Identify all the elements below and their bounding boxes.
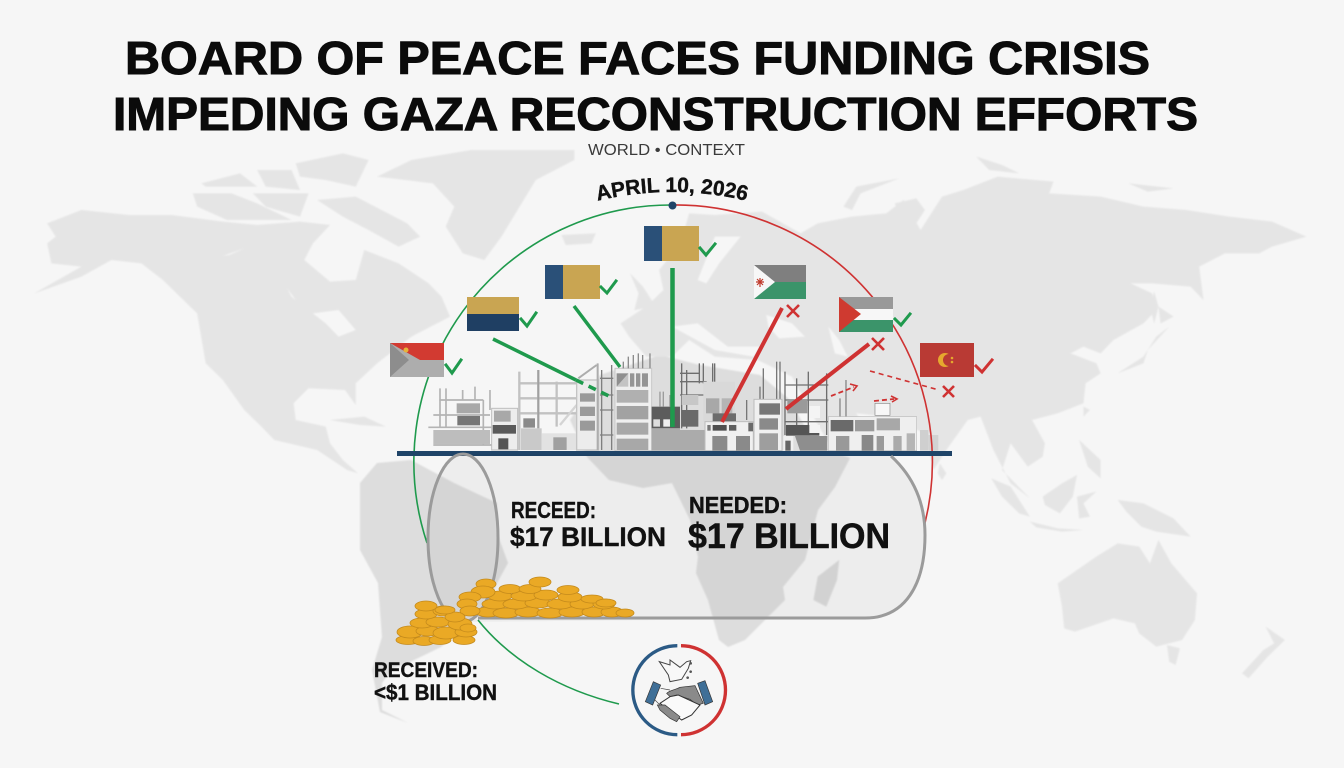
- base bar: [397, 451, 952, 456]
- label: received below pipe: RECEIVED:: [374, 659, 478, 682]
- subtitle: WORLD • CONTEXT: [588, 142, 745, 159]
- date arc label: APRIL 10, 2026: [598, 177, 748, 201]
- red arc: [672, 205, 932, 523]
- flag: Palestine style: [839, 297, 893, 332]
- label: needed: NEEDED:: [689, 492, 787, 518]
- green connector lines: [493, 268, 672, 427]
- construction skyline right: [673, 362, 938, 451]
- label: received inside pipe: [510, 497, 666, 552]
- coin pile spilled: [396, 601, 477, 646]
- construction skyline left: [428, 353, 680, 451]
- flag: grey green white: [754, 265, 806, 299]
- label: received inside pipe: RECEED:: [511, 497, 596, 523]
- funding pipe: [428, 454, 925, 622]
- flag: navy and gold centre: [644, 226, 699, 261]
- world map background: [34, 150, 1306, 723]
- flag: tan over navy: [467, 297, 519, 331]
- green arc: [414, 205, 672, 704]
- flag: red crescent: [920, 343, 974, 377]
- title: BOARD OF PEACE FACES FUNDING CRISIS: [125, 32, 1150, 84]
- title: IMPEDING GAZA RECONSTRUCTION EFFORTS: [113, 88, 1198, 140]
- top dot: [668, 202, 676, 210]
- red connector lines: [722, 308, 939, 422]
- label: received inside pipe: $17 BILLION: [510, 522, 666, 552]
- title: [113, 32, 1198, 140]
- label: received below pipe: <$1 BILLION: [374, 680, 497, 705]
- status check marks: [446, 244, 992, 373]
- label: received below pipe: [374, 659, 497, 705]
- label: needed: [688, 492, 890, 556]
- emblem: dove and handshake: [633, 646, 725, 735]
- status x marks: [787, 305, 954, 397]
- flag: navy and gold: [545, 265, 600, 299]
- coin pile in pipe: [457, 577, 634, 618]
- flag: red and grey: [390, 343, 444, 377]
- label: needed: $17 BILLION: [688, 517, 890, 556]
- seas and lakes knocked out: [223, 237, 848, 357]
